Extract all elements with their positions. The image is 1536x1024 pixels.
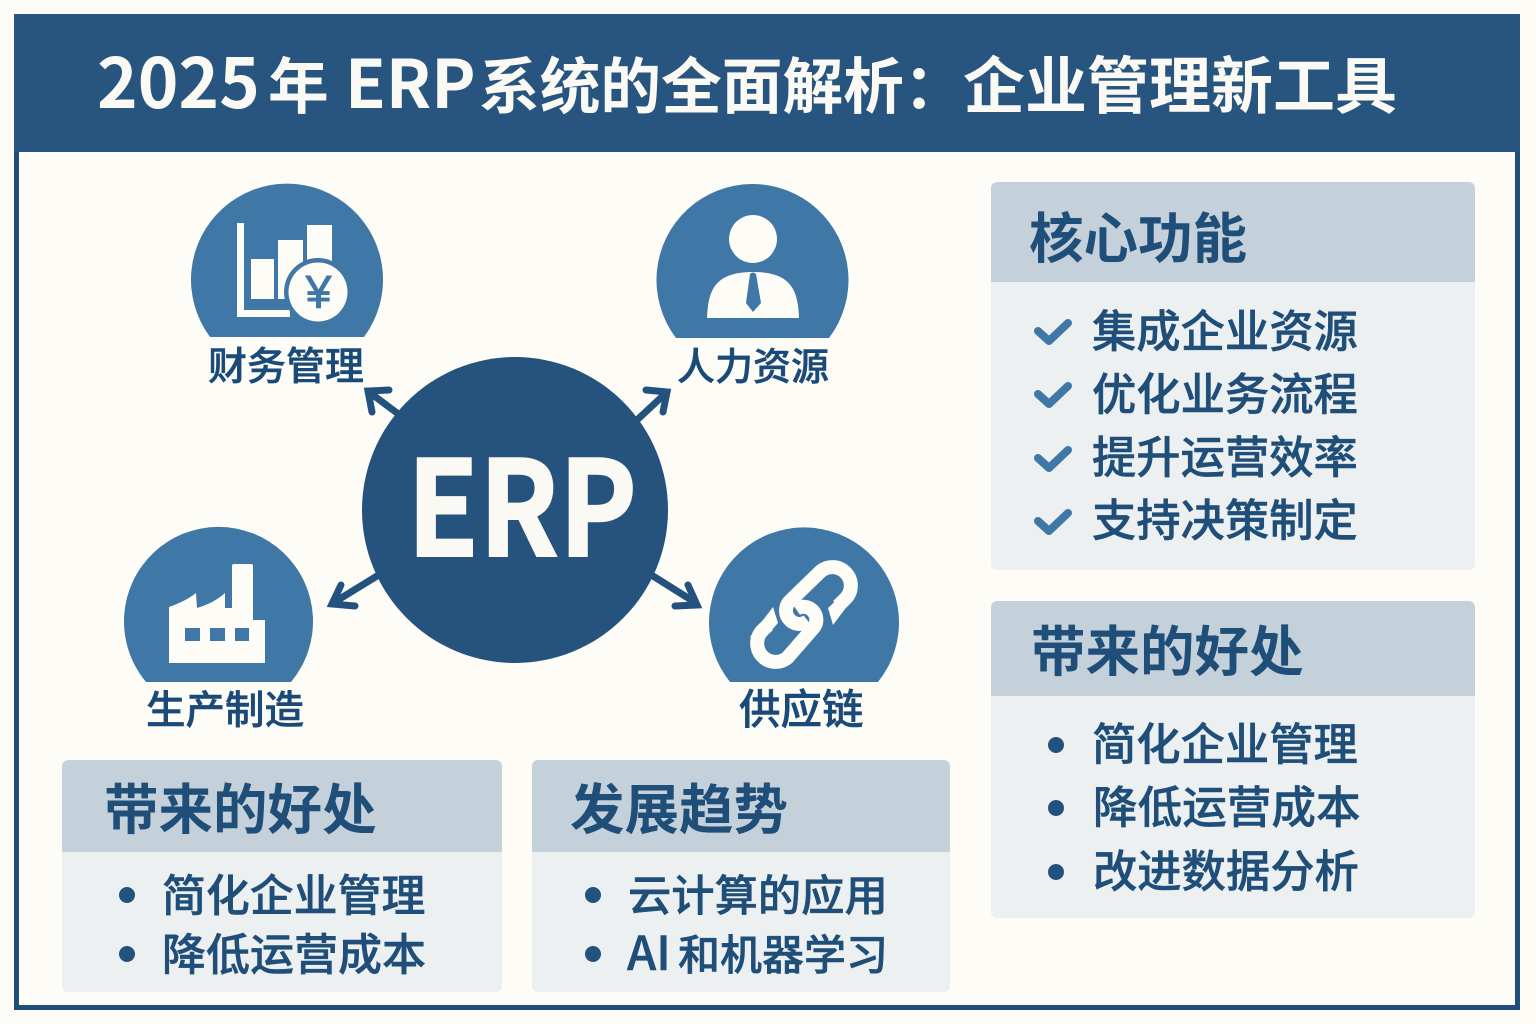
icon: finance chart and yen coin: ¥ [305, 266, 332, 318]
center ERP circle: ERP [407, 404, 637, 595]
list: benefits bottom [119, 872, 426, 980]
label: production: 生产制造 [146, 689, 304, 733]
heading: trends: 发展趋势 [570, 780, 788, 841]
list: benefits right: 降低运营成本 [1093, 784, 1361, 833]
label: supply chain: 供应链 [739, 686, 864, 733]
list: core functions: 提升运营效率 [1092, 434, 1358, 483]
list: core functions: 支持决策制定 [1092, 497, 1358, 546]
list: benefits bottom: 降低运营成本 [162, 931, 426, 980]
list: trends [585, 873, 888, 984]
center ERP circle [362, 357, 668, 663]
list: trends: 和机器学习 [678, 922, 888, 983]
heading: benefits right [991, 601, 1475, 696]
panel: benefits bottom [62, 760, 502, 992]
list: benefits right: 改进数据分析 [1093, 848, 1359, 897]
panel: benefits right [991, 601, 1475, 918]
title: 年 [268, 39, 329, 126]
list: core functions: 集成企业资源 [1092, 308, 1358, 357]
arrow: to HR [637, 390, 667, 420]
title: 系统的全面解析： [479, 39, 965, 126]
list: trends: 云计算的应用 [628, 873, 888, 921]
arrow: to finance [368, 390, 397, 413]
panel: HR node [656, 184, 848, 389]
panel: supply chain node [709, 527, 899, 733]
icon: factory [124, 527, 313, 682]
list: core functions [1038, 308, 1358, 546]
icon: chain link [709, 527, 899, 682]
heading: benefits bottom: 带来的好处 [104, 780, 377, 841]
panel: trends [532, 760, 950, 992]
panel: production node [124, 527, 313, 733]
heading: core functions [991, 182, 1475, 282]
heading: benefits bottom [62, 760, 502, 852]
heading: benefits right: 带来的好处 [1031, 622, 1304, 683]
heading: trends [532, 760, 950, 852]
list: core functions: 优化业务流程 [1092, 371, 1358, 420]
title: 企业管理新工具 [963, 36, 1397, 126]
list: trends: AI [627, 915, 671, 984]
list: benefits right: 简化企业管理 [1092, 721, 1358, 770]
arrow: to supply chain [653, 576, 697, 606]
title: 2025 [97, 28, 260, 128]
label: HR: 人力资源 [677, 347, 829, 389]
heading: core functions: 核心功能 [1029, 209, 1247, 270]
icon: finance chart and yen coin [191, 184, 383, 337]
panel: core functions [991, 182, 1475, 570]
title: ERP [345, 32, 476, 128]
icon: person [656, 184, 848, 338]
panel: finance node [191, 184, 383, 389]
title bar [14, 14, 1520, 152]
list: benefits right [1048, 721, 1361, 897]
arrow: to production [332, 576, 377, 606]
label: finance: 财务管理 [208, 346, 364, 389]
list: benefits bottom: 简化企业管理 [162, 872, 425, 921]
